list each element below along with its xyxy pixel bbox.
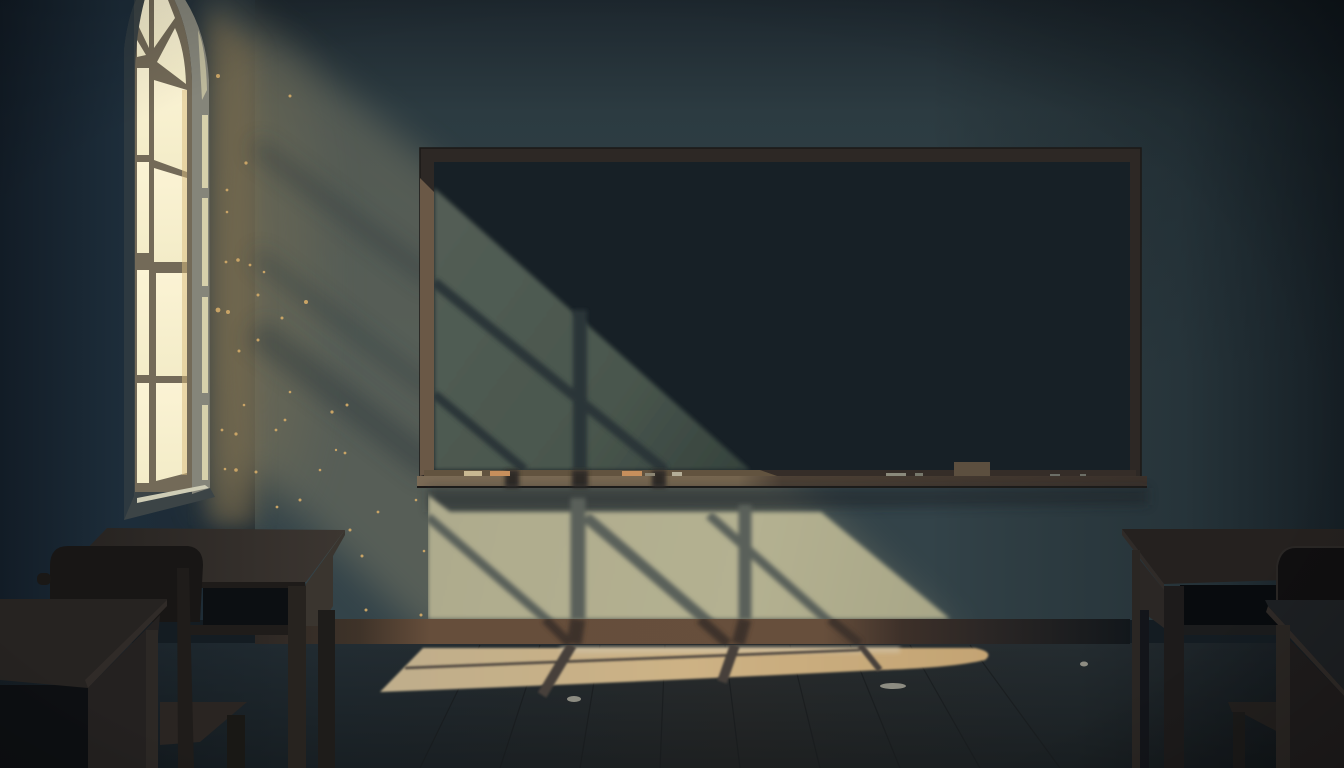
floor bar shadows [405, 645, 880, 695]
desk: right front [1265, 600, 1344, 768]
desk: left rear [55, 528, 345, 768]
sunlight beam on wall [205, 0, 960, 640]
ledge shadow stripes [505, 470, 666, 488]
window bar shadows on board [434, 282, 665, 470]
window [124, 0, 215, 520]
window glow [182, 90, 187, 475]
board surface [434, 162, 1130, 470]
desk: right rear [1122, 529, 1344, 768]
sunlight on floor [380, 645, 988, 695]
window glass panes [137, 0, 187, 483]
chair: left [37, 546, 247, 768]
blackboard [417, 148, 1147, 488]
chalk ledge [417, 476, 1147, 487]
baseboard [255, 619, 1130, 644]
sunlight below board [428, 494, 950, 619]
board frame [420, 148, 1141, 478]
floor [0, 643, 1344, 768]
shadow bands in beam [255, 145, 435, 470]
floor debris [567, 662, 1088, 702]
desk: left front [0, 599, 167, 768]
window reveal light strips [198, 30, 208, 480]
window sill [137, 485, 209, 503]
back wall [250, 0, 1344, 620]
left side wall [0, 0, 255, 620]
ledge cast shadow [428, 488, 1148, 512]
chair: right [1228, 547, 1344, 768]
chalk pieces [464, 471, 1086, 476]
eraser [954, 462, 990, 476]
window bar shadows on lower wall [428, 496, 835, 619]
sunlight on board [434, 188, 750, 470]
window frame [124, 0, 215, 520]
dust particles [216, 74, 425, 616]
chalk tray [424, 470, 1136, 477]
floor chalk dust strip [560, 646, 900, 653]
window sash bars [135, 0, 192, 492]
